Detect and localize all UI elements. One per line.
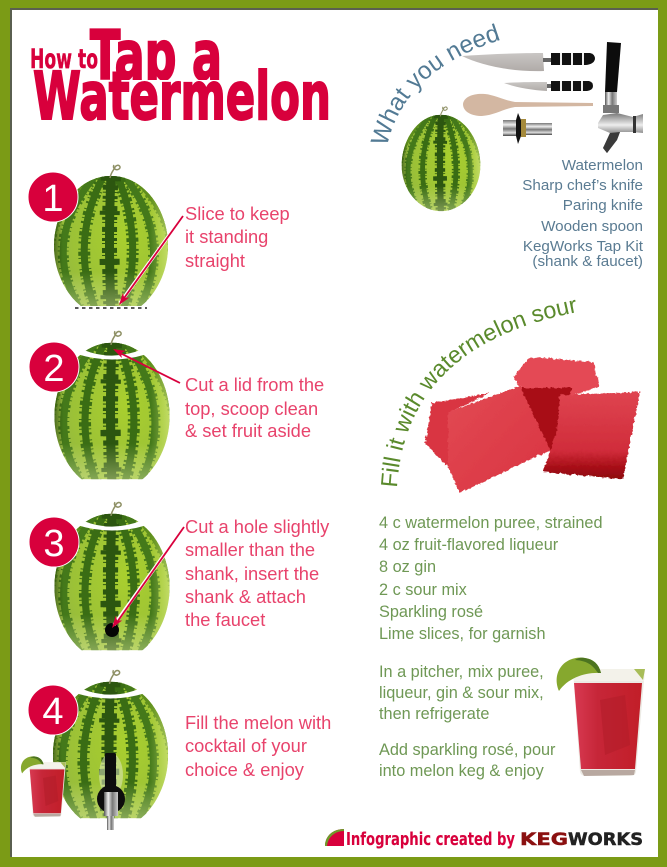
supplies list: KegWorks Tap Kit [523, 238, 644, 255]
title: How to [30, 44, 98, 75]
title [31, 28, 328, 121]
title: Watermelon [33, 58, 331, 135]
step 1 text: Slice to keep [185, 203, 290, 224]
step 4 text: choice & enjoy [185, 759, 305, 780]
supplies list: Sharp chef’s knife [522, 177, 643, 194]
ingredients list: Lime slices, for garnish [379, 625, 546, 643]
step 3 text: smaller than the [185, 539, 315, 560]
footer credit: WORKS [568, 830, 643, 850]
directions: Add sparkling rosé, pour [379, 741, 556, 759]
footer credit: KEG [520, 830, 568, 850]
step 4 text: Fill the melon with [185, 712, 331, 733]
ingredients list: 2 c sour mix [379, 581, 467, 599]
title line: tap a: Tap a [90, 17, 222, 96]
ingredients list: 4 oz fruit-flavored liqueur [379, 536, 559, 554]
step 3 arrow [109, 527, 184, 630]
step 1 text: it standing [185, 226, 268, 247]
heading: what you need: What you need [370, 23, 500, 142]
step 4 badge: 4 [42, 691, 64, 733]
supplies list: Paring knife [563, 197, 643, 214]
heading: fill it with watermelon sour: Fill it with watermelon sour [381, 300, 576, 486]
step 3 badge: 3 [43, 523, 65, 565]
step 1 arrow [116, 216, 183, 307]
heading curve [397, 312, 578, 488]
supplies list: Watermelon [562, 157, 643, 174]
step 2 melon [49, 331, 175, 484]
step 3 text: shank, insert the [185, 563, 319, 584]
step 4 melon [48, 670, 173, 824]
step 2 text: Cut a lid from the [185, 374, 324, 395]
wooden spoon [463, 94, 593, 116]
step 1 badge [28, 172, 78, 222]
step 3 melon [49, 502, 175, 656]
chef's knife [462, 53, 595, 71]
tap shank [503, 113, 552, 144]
step 3 text: the faucet [185, 609, 265, 630]
directions: In a pitcher, mix puree, [379, 663, 544, 681]
step 2 text: top, scoop clean [185, 398, 318, 419]
footer credit: Infographic created by [346, 829, 515, 850]
step 3 text: shank & attach [185, 586, 306, 607]
watermelon cubes [425, 357, 640, 493]
directions: then refrigerate [379, 705, 489, 723]
supplies list: Wooden spoon [541, 218, 643, 235]
heading curve [387, 41, 497, 147]
step 1 text: straight [185, 250, 245, 271]
directions: liqueur, gin & sour mix, [379, 684, 544, 702]
step 3 badge [29, 517, 79, 567]
ingredients list: 8 oz gin [379, 558, 436, 576]
watermelon supply [399, 107, 483, 215]
step 2 badge [29, 342, 79, 392]
step 4 faucet [97, 753, 125, 830]
step 3 text: Cut a hole slightly [185, 516, 330, 537]
ingredients list: Sparkling rosé [379, 603, 483, 621]
step 2 arrow [111, 345, 180, 383]
step 2 text: & set fruit aside [185, 420, 311, 441]
step 1 melon [51, 165, 171, 311]
large cocktail [557, 658, 645, 776]
step 4 text: cocktail of your [185, 735, 307, 756]
step 1 badge: 1 [42, 178, 64, 220]
step 2 badge: 2 [43, 348, 65, 390]
step 4 cocktail [21, 756, 66, 817]
ingredients list: 4 c watermelon puree, strained [379, 514, 603, 532]
step 4 badge [28, 685, 78, 735]
directions: into melon keg & enjoy [379, 762, 545, 780]
tap faucet [598, 42, 643, 153]
supplies list: (shank & faucet) [532, 253, 643, 270]
paring knife [504, 81, 593, 91]
